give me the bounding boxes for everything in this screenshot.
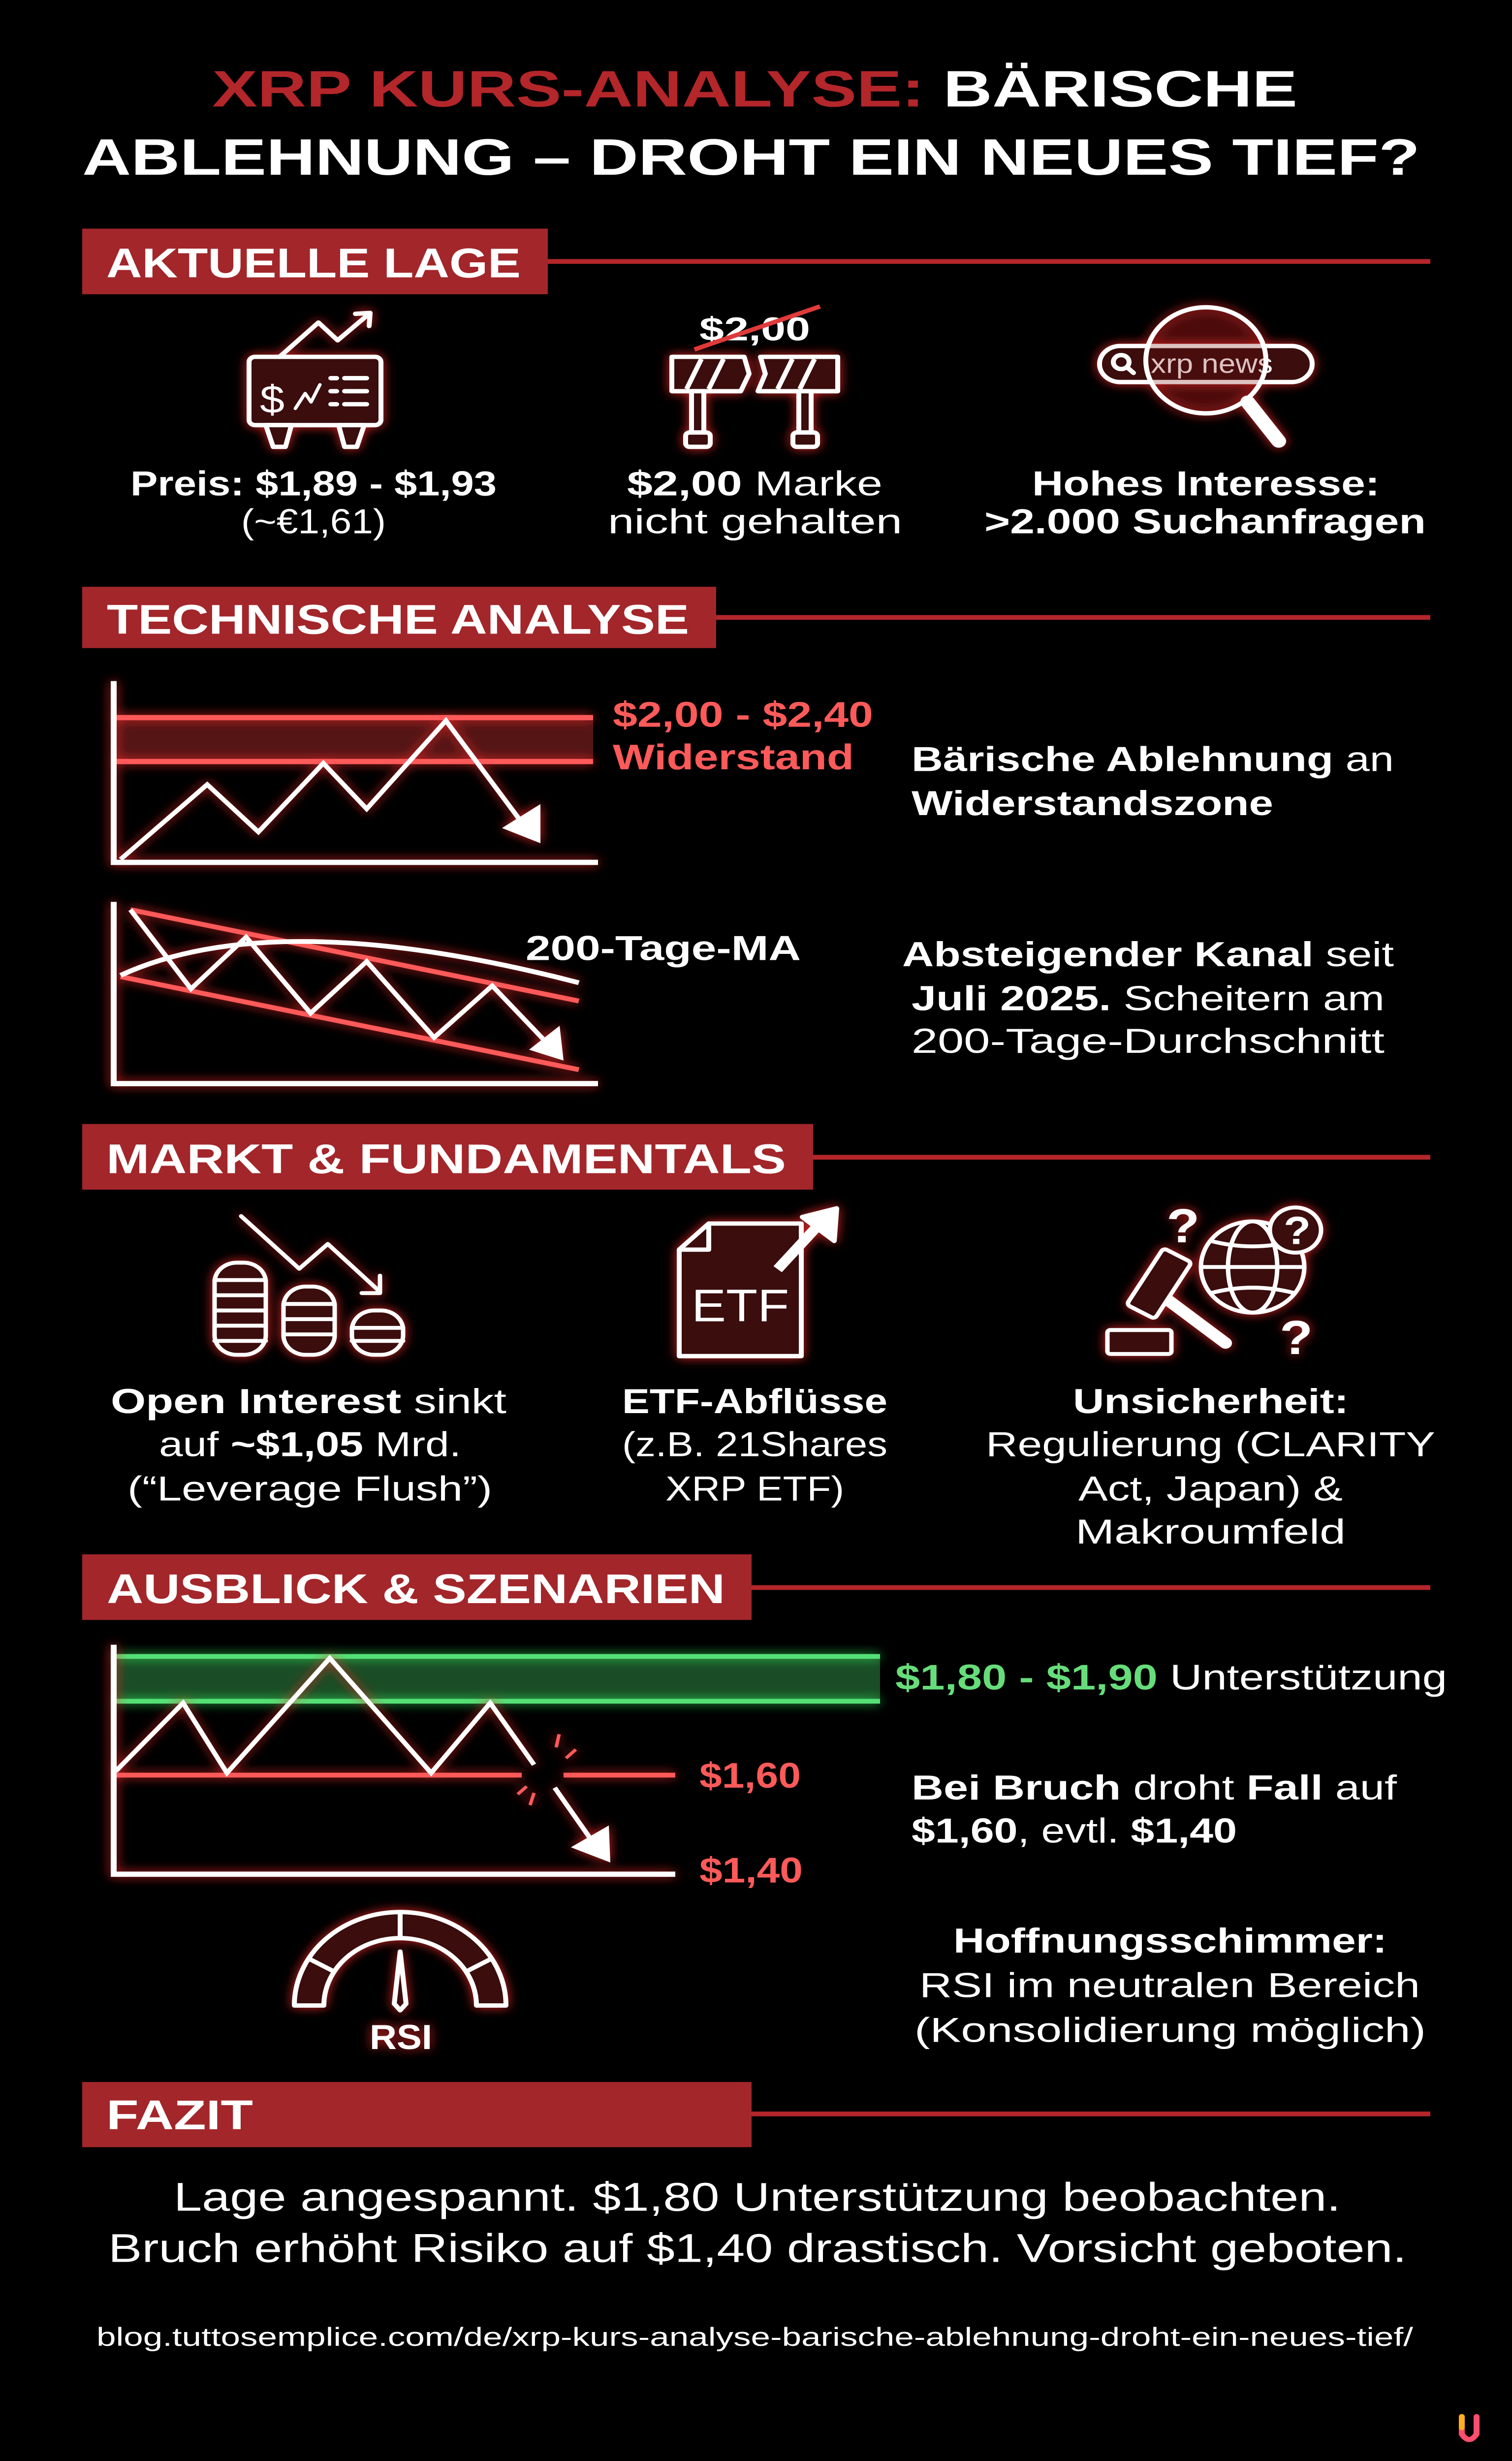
- text: breakdown scenario: Bei Bruch droht Fall auf: [912, 1768, 1397, 1807]
- icon: gavel and globe: ?: [1284, 1208, 1311, 1252]
- text: conclusion: Lage angespannt. $1,80 Unterstützung beobachten.: [174, 2175, 1341, 2219]
- captions: Aktuelle Lage: (~€1,61): [241, 502, 386, 541]
- text: descending channel: [902, 935, 1394, 1060]
- captions: Markt: Open Interest sinkt: [111, 1382, 506, 1420]
- icon: ETF document: [679, 1208, 837, 1356]
- captions: Markt: (“Leverage Flush”): [127, 1469, 492, 1508]
- title: ABLEHNUNG – DROHT EIN NEUES TIEF?: [82, 128, 1420, 186]
- icon: RSI gauge: [294, 1912, 506, 2056]
- icon: coins falling: [215, 1216, 403, 1355]
- text: RSI hope: [914, 1921, 1426, 2050]
- text: conclusion: [108, 2175, 1407, 2271]
- icon: xrp news search: xrp news: [1151, 349, 1273, 379]
- logo: [1462, 2417, 1477, 2439]
- icon: gavel and globe: ?: [1166, 1199, 1199, 1252]
- section header: Technische Analyse: TECHNISCHE ANALYSE: [107, 597, 689, 643]
- captions: Aktuelle Lage: $2,00 Marke: [627, 464, 882, 503]
- icon: gavel and globe: [1107, 1199, 1321, 1364]
- captions: Markt: Makroumfeld: [1075, 1512, 1346, 1551]
- captions: Aktuelle Lage: nicht gehalten: [608, 502, 902, 541]
- captions: Markt: Regulierung (CLARITY: [986, 1425, 1435, 1463]
- text: breakdown scenario: [912, 1768, 1397, 1850]
- text: bearish rejection: Widerstandszone: [912, 784, 1273, 822]
- text: descending channel: Absteigender Kanal seit: [902, 935, 1394, 974]
- section header: Ausblick & Szenarien: [82, 1554, 1430, 1620]
- section header: Fazit: [82, 2082, 1430, 2147]
- text: descending channel: Juli 2025. Scheitern am: [912, 979, 1385, 1017]
- icon: price monitor: $: [260, 378, 284, 421]
- chart: support and breakdown: [114, 1645, 880, 1874]
- icon: barrier $2,00: $2,00: [699, 311, 810, 347]
- label: resistance: Widerstand: [613, 737, 854, 777]
- title: [82, 60, 1420, 186]
- icon: price monitor: [249, 313, 381, 447]
- section header: Markt & Fundamentals: [82, 1124, 1430, 1190]
- captions: Markt: XRP ETF): [665, 1469, 844, 1508]
- text: bearish rejection: Bärische Ablehnung an: [912, 740, 1394, 779]
- captions: Markt: Unsicherheit:: [1073, 1382, 1349, 1420]
- labels: support / levels: $1,80 - $1,90 Unterstützung: [895, 1658, 1447, 1697]
- labels: support / levels: $1,60: [699, 1756, 801, 1796]
- text: breakdown scenario: $1,60, evtl. $1,40: [912, 1811, 1237, 1850]
- text: RSI hope: (Konsolidierung möglich): [914, 2011, 1426, 2050]
- text: RSI hope: RSI im neutralen Bereich: [919, 1966, 1420, 2005]
- section header: Fazit: FAZIT: [106, 2092, 253, 2139]
- section header: Aktuelle Lage: [82, 229, 1430, 294]
- captions: Aktuelle Lage: Preis: $1,89 - $1,93: [130, 464, 497, 503]
- captions: Markt: Act, Japan) &: [1078, 1469, 1343, 1508]
- labels: support / levels: $1,40: [699, 1851, 803, 1891]
- source url: blog.tuttosemplice.com/de/xrp-kurs-analyse-barische-ablehnung-droht-ein-neues-tief/: [96, 2322, 1413, 2351]
- captions: Markt: auf ~$1,05 Mrd.: [159, 1425, 461, 1463]
- icon: barrier $2,00: [672, 307, 838, 447]
- text: conclusion: Bruch erhöht Risiko auf $1,40 drastisch. Vorsicht geboten.: [108, 2226, 1407, 2271]
- section header: Technische Analyse: [82, 587, 1430, 648]
- chart: resistance rejection: [114, 681, 598, 862]
- labels: support / levels: [699, 1658, 1447, 1891]
- chart: descending channel: [114, 902, 598, 1084]
- title: XRP KURS-ANALYSE: BÄRISCHE: [212, 60, 1297, 118]
- icon: gavel and globe: ?: [1280, 1311, 1313, 1364]
- section header: Ausblick & Szenarien: AUSBLICK & SZENARIEN: [107, 1566, 725, 1612]
- captions: Aktuelle Lage: >2.000 Suchanfragen: [984, 502, 1426, 541]
- icon: RSI gauge: RSI: [370, 2018, 432, 2056]
- icon: xrp news search: [1100, 307, 1312, 441]
- text: descending channel: 200-Tage-Durchschnitt: [912, 1021, 1385, 1060]
- captions: Markt: ETF-Abflüsse: [622, 1382, 887, 1420]
- label: 200-Tage-MA: 200-Tage-MA: [526, 929, 801, 968]
- captions: Markt: [111, 1382, 1435, 1551]
- icon: ETF document: ETF: [692, 1280, 789, 1331]
- label: resistance: [613, 695, 873, 777]
- captions: Aktuelle Lage: Hohes Interesse:: [1032, 464, 1380, 503]
- section header: Aktuelle Lage: AKTUELLE LAGE: [106, 240, 521, 286]
- label: resistance: $2,00 - $2,40: [613, 695, 873, 734]
- text: bearish rejection: [912, 740, 1394, 822]
- text: RSI hope: Hoffnungsschimmer:: [953, 1921, 1387, 1960]
- section header: Markt & Fundamentals: MARKT & FUNDAMENTALS: [106, 1136, 786, 1182]
- captions: Markt: (z.B. 21Shares: [622, 1425, 887, 1463]
- captions: Aktuelle Lage: [130, 464, 1426, 541]
